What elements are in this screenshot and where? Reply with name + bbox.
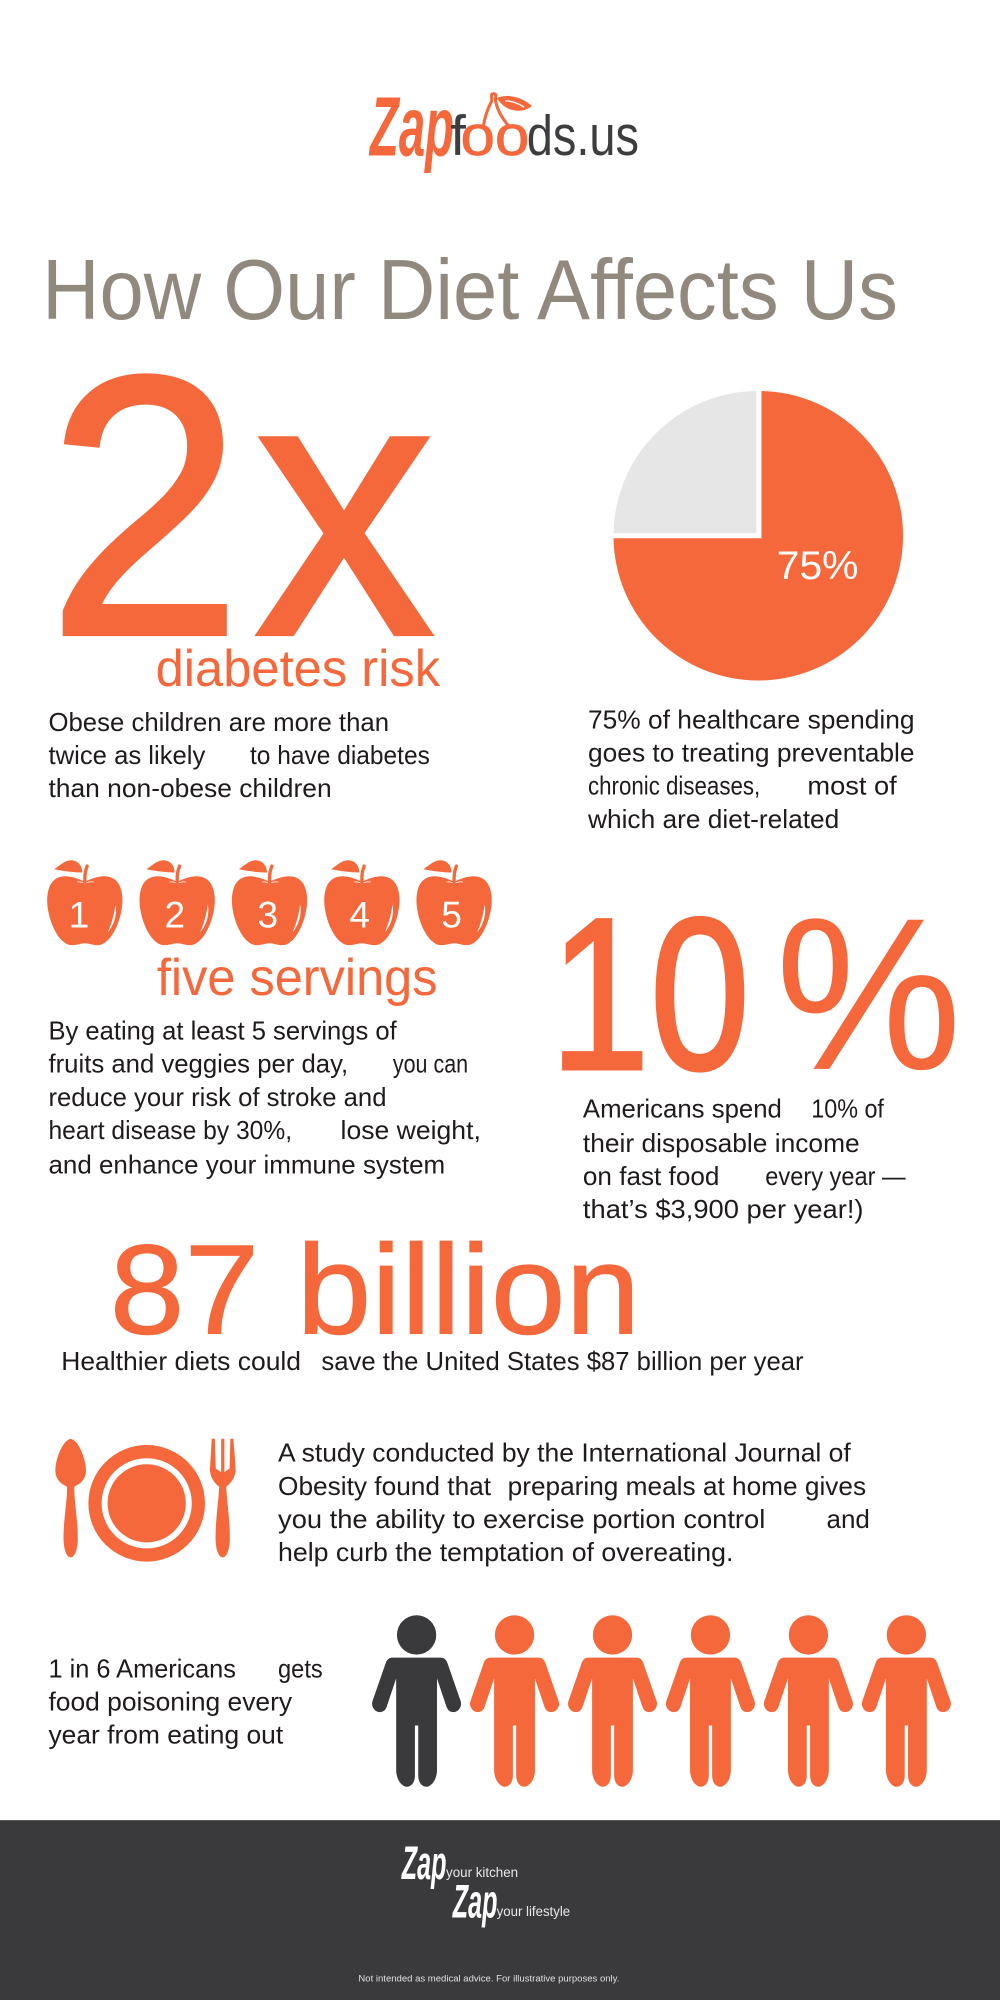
- icons: five numbered apples: 5: [441, 894, 462, 935]
- text block: healthcare: which are diet-related: [587, 806, 839, 834]
- heading: five servings: five servings: [157, 949, 438, 1007]
- text block: obese children: twice as likely: [48, 742, 206, 770]
- text block: study: A study conducted by the International Journal of: [278, 1440, 852, 1468]
- text block: servings: fruits and veggies per day,: [48, 1051, 348, 1079]
- icons: five numbered apples: 1: [69, 894, 89, 935]
- title: How Our Diet Affects Us: [42, 243, 898, 338]
- text block: 1 in 6: gets: [278, 1655, 323, 1683]
- tagline: Zap your lifestyle: your lifestyle: [497, 1904, 570, 1919]
- tagline: Zap your lifestyle: Zap: [452, 1876, 497, 1929]
- text block: servings: you can: [393, 1051, 468, 1079]
- text block: servings: heart disease by 30%,: [48, 1117, 292, 1145]
- icon: cherry stems and leaf: [483, 94, 509, 126]
- text block: study: preparing meals at home gives: [508, 1473, 866, 1501]
- text block: disposable income: on fast food: [583, 1163, 719, 1191]
- text block: obese children: Obese children are more than: [48, 709, 389, 737]
- disclaimer: Not intended as medical advice. For illustrative purposes only.: [358, 1974, 619, 1984]
- text block: 1 in 6: year from eating out: [48, 1722, 283, 1750]
- big stat: 10%: [550, 873, 962, 1115]
- text block: study: [278, 1440, 870, 1567]
- big stat: 87 billion: 87 billion: [110, 1220, 640, 1362]
- text block: disposable income: their disposable income: [583, 1130, 860, 1158]
- text block: servings: and enhance your immune system: [48, 1151, 445, 1179]
- text block: servings: [48, 1018, 481, 1179]
- panel: 87 billion: [61, 1220, 804, 1376]
- text block: savings: Healthier diets could: [61, 1348, 301, 1376]
- text block: disposable income: [583, 1095, 906, 1224]
- text block: healthcare: [587, 706, 915, 834]
- big stat: 2x: [47, 300, 434, 713]
- text block: obese children: to have diabetes: [250, 742, 430, 770]
- text block: healthcare: 75% of healthcare spending: [588, 706, 915, 734]
- tagline: Zap your kitchen: Zap: [401, 1837, 446, 1890]
- text block: 1 in 6: 1 in 6 Americans: [48, 1655, 236, 1683]
- panel: food poisoning: [48, 1615, 951, 1787]
- footer: [0, 1820, 1000, 2000]
- big stat: 10%: 10: [550, 873, 750, 1115]
- text block: study: you the ability to exercise portion control: [278, 1506, 765, 1534]
- pie chart: 75%: 75%: [777, 544, 858, 588]
- big stat: 2x: x: [254, 300, 434, 713]
- text block: servings: lose weight,: [341, 1117, 481, 1145]
- big stat: 2x: 2: [47, 300, 242, 713]
- heading: diabetes risk: diabetes risk: [156, 640, 441, 698]
- text block: disposable income: 10% of: [811, 1095, 885, 1123]
- pie chart: 75%: [614, 391, 903, 680]
- text block: savings: save the United States $87 billion per year: [321, 1348, 804, 1376]
- text block: disposable income: that’s $3,900 per year!): [583, 1196, 864, 1224]
- text block: study: and: [827, 1506, 870, 1534]
- big stat: 10%: %: [776, 873, 962, 1115]
- text block: disposable income: Americans spend: [583, 1095, 782, 1123]
- text block: disposable income: every year —: [765, 1163, 906, 1191]
- text block: servings: By eating at least 5 servings of: [48, 1018, 398, 1046]
- icons: five numbered apples: 4: [349, 894, 370, 935]
- text block: obese children: than non-obese children: [48, 775, 332, 803]
- icons: five numbered apples: 2: [164, 894, 185, 935]
- icon: plate with spoon and fork: [55, 1439, 236, 1562]
- text block: healthcare: chronic diseases,: [588, 773, 760, 801]
- logo wordmark: foods.us: f: [450, 104, 466, 167]
- text block: obese children: [48, 709, 430, 803]
- panel: diabetes risk: [47, 300, 441, 803]
- logo wordmark: Zap: Zap: [369, 80, 454, 174]
- text block: healthcare: most of: [807, 773, 898, 801]
- panel: five servings: [47, 860, 492, 1179]
- panel: healthcare spending: [587, 391, 915, 834]
- text block: 1 in 6: food poisoning every: [48, 1688, 292, 1716]
- logo: ds.us: [527, 104, 639, 167]
- text block: savings: [61, 1348, 804, 1376]
- text block: study: Obesity found that: [278, 1473, 491, 1501]
- tagline: Zap your kitchen: your kitchen: [446, 1865, 518, 1880]
- icons: five numbered apples: 3: [258, 894, 278, 935]
- text block: 1 in 6: [48, 1655, 323, 1750]
- text block: healthcare: goes to treating preventable: [588, 739, 915, 767]
- logo: oo: [460, 104, 529, 167]
- text block: servings: reduce your risk of stroke and: [48, 1084, 386, 1112]
- icons: one in six people: [372, 1615, 951, 1787]
- text block: study: help curb the temptation of overeating.: [278, 1539, 733, 1567]
- panel: fast food: [550, 873, 962, 1224]
- logo: [369, 80, 639, 174]
- icons: five numbered apples: [47, 860, 492, 945]
- panel: home cooking: [55, 1439, 870, 1567]
